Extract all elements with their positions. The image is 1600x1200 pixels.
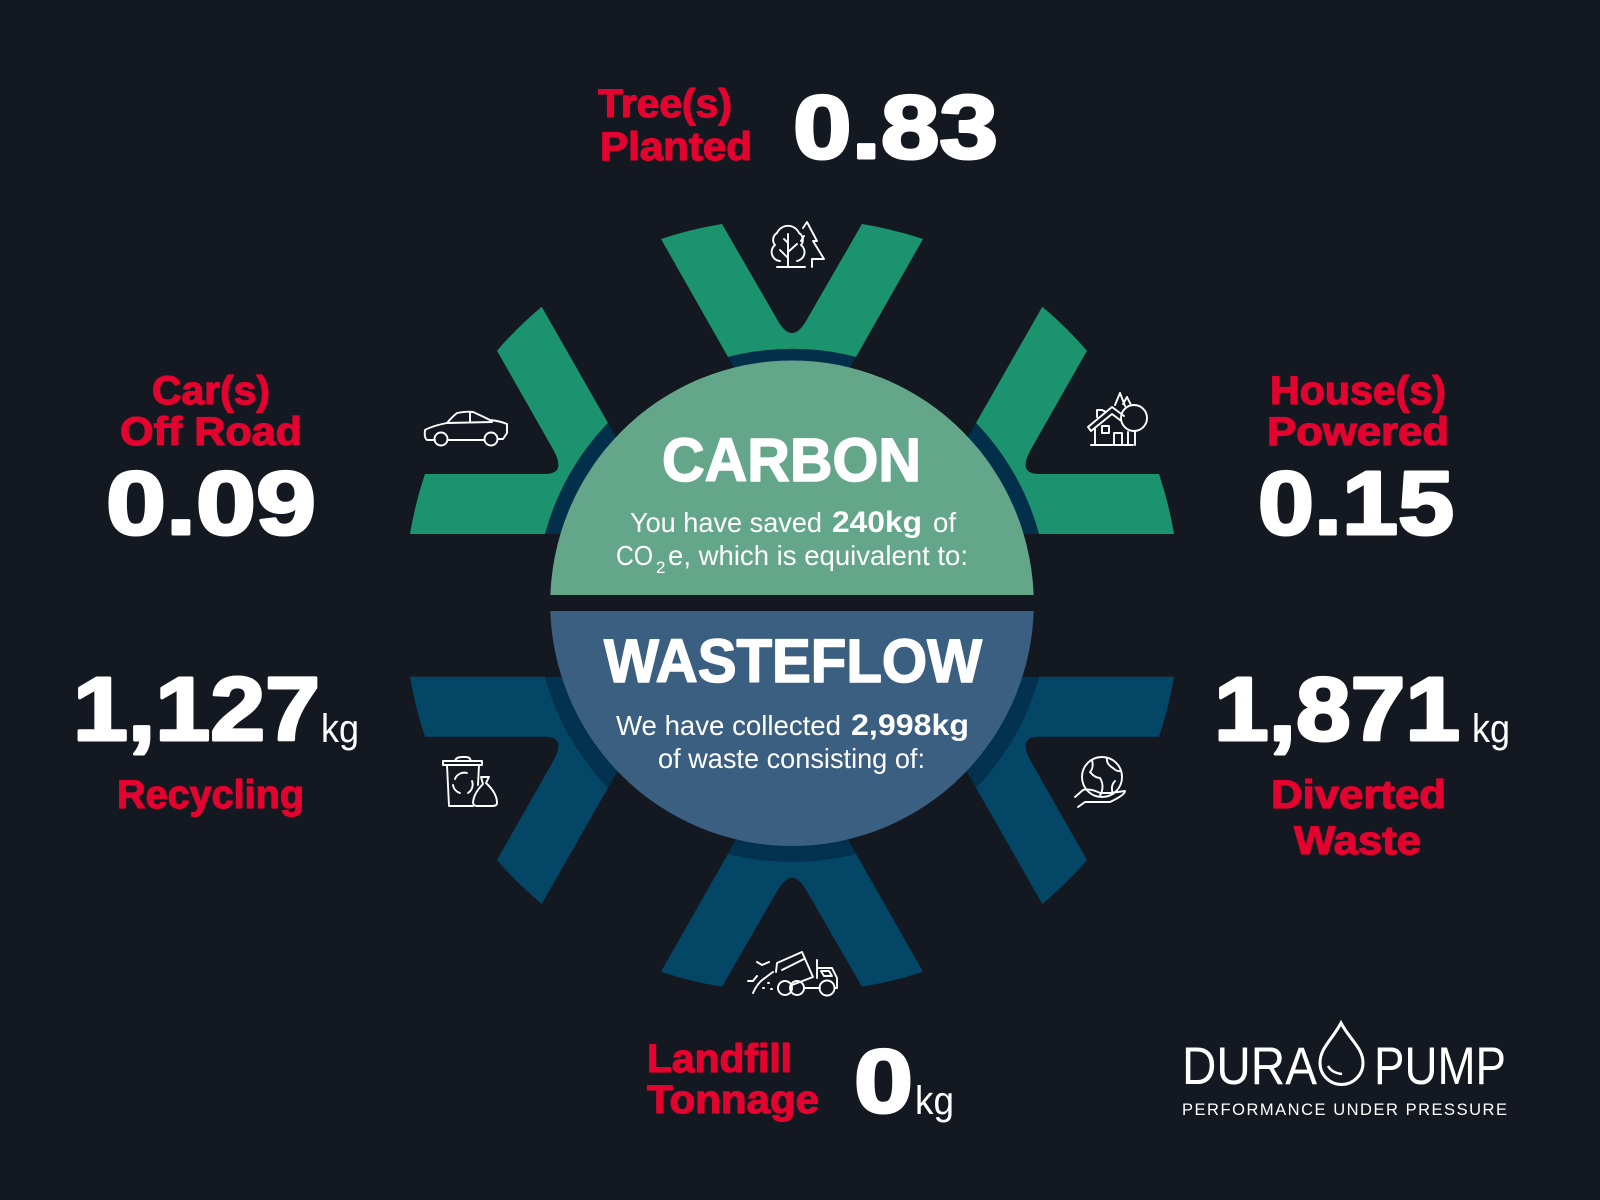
- heading: wasteflow: WASTEFLOW: [604, 627, 982, 695]
- stat: diverted waste: kg: [1472, 707, 1510, 751]
- stat: cars off road: [106, 369, 316, 554]
- stat: trees planted: 0.83: [793, 78, 998, 178]
- stat: diverted waste: Waste: [1294, 819, 1421, 863]
- stat: houses powered: House(s): [1270, 369, 1446, 413]
- icon: dump truck: [748, 952, 837, 996]
- icon: house and tree: [1088, 393, 1147, 445]
- spoke: bottom V: [661, 854, 923, 987]
- text: carbon saved: [616, 506, 968, 577]
- spoke: lower right: [976, 677, 1174, 904]
- stat: recycling: [73, 660, 359, 817]
- stat: recycling: Recycling: [117, 773, 304, 817]
- stat: cars off road: Off Road: [120, 410, 302, 454]
- stat: trees planted: [598, 78, 998, 178]
- stat: diverted waste: 1,871: [1214, 660, 1460, 760]
- wasteflow spokes: [410, 677, 1174, 987]
- text: waste collected: [616, 709, 969, 774]
- stat: trees planted: Tree(s): [598, 82, 732, 126]
- stat: landfill tonnage: Landfill: [647, 1037, 792, 1081]
- stat: landfill tonnage: [647, 1032, 954, 1132]
- logo: Dura Pump: PERFORMANCE UNDER PRESSURE: [1182, 1101, 1507, 1119]
- spoke ring: lower left: [545, 677, 625, 788]
- stat: landfill tonnage: Tonnage: [647, 1078, 819, 1122]
- stat: diverted waste: [1214, 660, 1510, 863]
- spoke ring: bottom: [728, 839, 856, 862]
- spoke ring: upper left: [545, 423, 625, 534]
- text: carbon saved: CO: [616, 540, 653, 571]
- text: carbon saved: e, which is equivalent to:: [668, 540, 968, 571]
- stat: houses powered: [1258, 369, 1454, 554]
- stat: cars off road: 0.09: [106, 454, 316, 554]
- text: carbon saved: 240kg: [832, 506, 922, 539]
- icon: trees: [772, 222, 824, 267]
- text: waste collected: of waste consisting of:: [658, 743, 925, 774]
- stat: landfill tonnage: kg: [915, 1079, 954, 1123]
- icon: water drop: [1320, 1023, 1363, 1084]
- stat: houses powered: 0.15: [1258, 454, 1454, 554]
- stat: cars off road: Car(s): [152, 369, 270, 413]
- text: carbon saved: of: [933, 507, 956, 538]
- spoke ring: lower right: [959, 677, 1039, 788]
- heading: carbon: CARBON: [662, 426, 921, 494]
- spoke: lower left: [410, 677, 608, 904]
- stat: landfill tonnage: 0: [854, 1032, 913, 1132]
- spoke: upper left: [410, 307, 608, 534]
- icon: car: [425, 412, 507, 446]
- carbon spokes: [410, 224, 1174, 534]
- text: carbon saved: 2: [656, 558, 665, 577]
- icon: recycling bin and bag: [443, 757, 497, 806]
- stat: recycling: 1,127: [73, 660, 320, 760]
- spoke: upper right: [976, 307, 1174, 534]
- logo: Dura Pump: [1182, 1023, 1507, 1119]
- stat: trees planted: Planted: [600, 125, 752, 169]
- stat: diverted waste: Diverted: [1271, 773, 1446, 817]
- stat: recycling: kg: [321, 707, 359, 751]
- text: waste collected: We have collected: [616, 710, 841, 741]
- stat: houses powered: Powered: [1267, 410, 1449, 454]
- text: waste collected: 2,998kg: [851, 709, 969, 742]
- text: carbon saved: You have saved: [630, 507, 822, 538]
- logo: Dura Pump: PUMP: [1374, 1037, 1506, 1096]
- logo: Dura Pump: DURA: [1182, 1037, 1318, 1096]
- panel: carbon half circle: [550, 360, 1034, 595]
- panel: wasteflow half circle: [550, 611, 1034, 846]
- spoke ring: top: [728, 349, 856, 371]
- icon: globe in hand: [1075, 757, 1125, 807]
- spoke: top V: [661, 224, 923, 357]
- spoke ring: upper right: [959, 423, 1039, 534]
